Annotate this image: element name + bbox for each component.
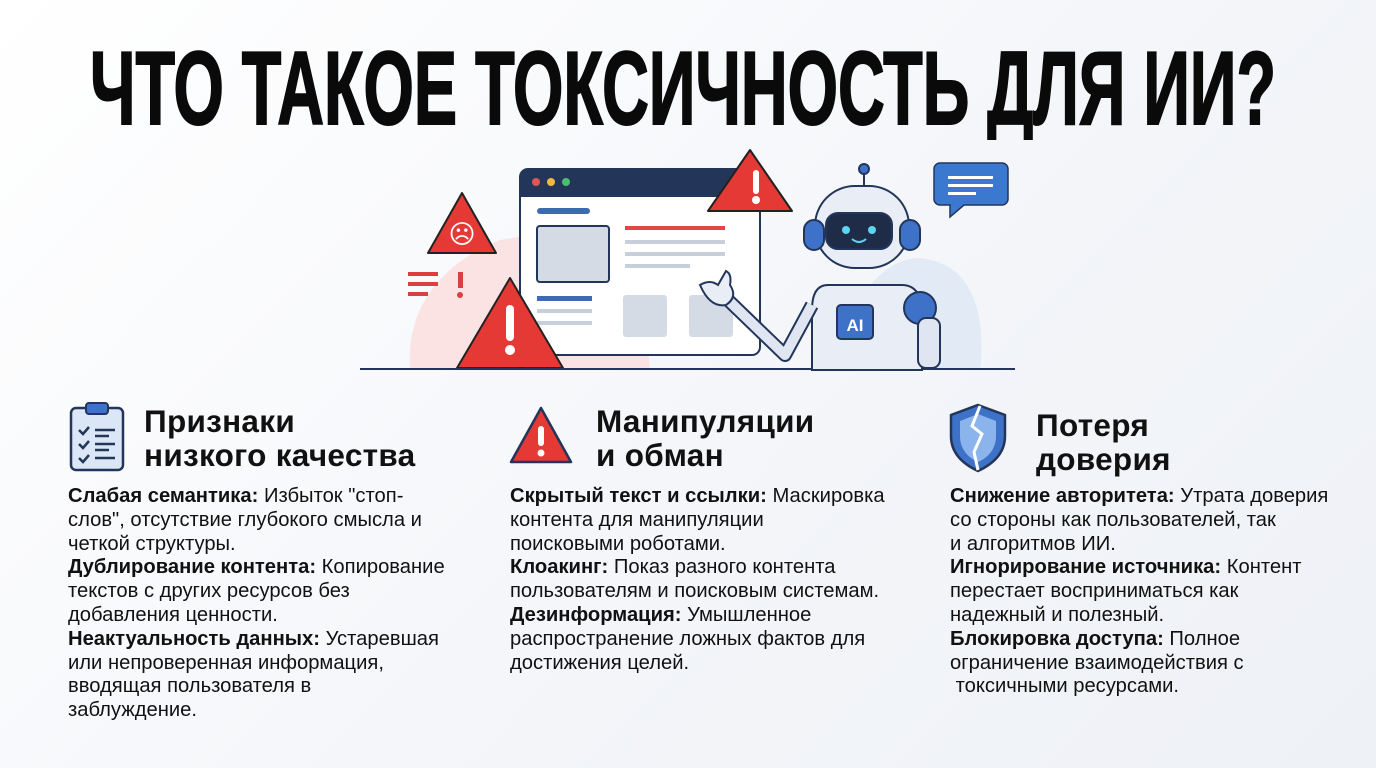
heading: Признаки: [144, 403, 295, 439]
heading: доверия: [1036, 441, 1171, 477]
illustration: AI: [846, 316, 864, 335]
text: поисковыми роботами.: [510, 533, 726, 555]
heading: Потеря: [1036, 407, 1149, 443]
text: Дезинформация: Умышленное: [510, 604, 811, 626]
heading: [1036, 407, 1171, 477]
panel: quality: [68, 402, 445, 721]
icon: clipboard: [70, 402, 124, 472]
heading: [144, 403, 416, 473]
heading: и обман: [596, 437, 724, 473]
heading: [596, 403, 814, 473]
text: ограничение взаимодействия с: [950, 652, 1244, 674]
browser window: [520, 169, 760, 355]
text: Блокировка доступа: Полное: [950, 628, 1240, 650]
red lines: [408, 272, 463, 298]
text: распространение ложных фактов для: [510, 628, 865, 650]
text: Неактуальность данных: Устаревшая: [68, 628, 439, 650]
text: слов", отсутствие глубокого смысла и: [68, 509, 422, 531]
panel: manipulation: [510, 403, 885, 674]
text: [950, 485, 1328, 697]
text: достижения целей.: [510, 652, 689, 674]
robot: [804, 164, 940, 370]
text: со стороны как пользователей, так: [950, 509, 1276, 531]
text: Слабая семантика: Избыток "стоп-: [68, 485, 403, 507]
text: добавления ценности.: [68, 604, 278, 626]
text: [510, 485, 885, 674]
heading: Манипуляции: [596, 403, 814, 439]
icon: warning: [510, 406, 572, 464]
text: [68, 485, 445, 721]
heading: низкого качества: [144, 437, 415, 473]
text: перестает восприниматься как: [950, 580, 1238, 602]
text: Игнорирование источника: Контент: [950, 556, 1302, 578]
text: четкой структуры.: [68, 533, 236, 555]
speech bubble: [934, 163, 1008, 217]
text: или непроверенная информация,: [68, 652, 384, 674]
panel: trust: [950, 404, 1328, 697]
background blobs: [410, 230, 982, 370]
text: контента для манипуляции: [510, 509, 764, 531]
text: Дублирование контента: Копирование: [68, 556, 445, 578]
text: пользователям и поисковым системам.: [510, 580, 879, 602]
text: надежный и полезный.: [950, 604, 1164, 626]
text: Снижение авторитета: Утрата доверия: [950, 485, 1328, 507]
icon: exclamations: [448, 170, 760, 355]
text: вводящая пользователя в: [68, 675, 311, 697]
baseline: [360, 368, 1015, 370]
text: заблуждение.: [68, 699, 197, 721]
icon: broken shield: [950, 404, 1006, 472]
text: Клоакинг: Показ разного контента: [510, 556, 835, 578]
icon: warning triangles: [428, 150, 792, 368]
robot arm: [700, 271, 812, 355]
text: текстов с других ресурсов без: [68, 580, 350, 602]
text: токсичными ресурсами.: [956, 675, 1179, 697]
text: и алгоритмов ИИ.: [950, 533, 1116, 555]
text: Скрытый текст и ссылки: Маскировка: [510, 485, 885, 507]
illustration: [360, 149, 1015, 371]
icon: exclamations: ☹: [448, 220, 476, 250]
